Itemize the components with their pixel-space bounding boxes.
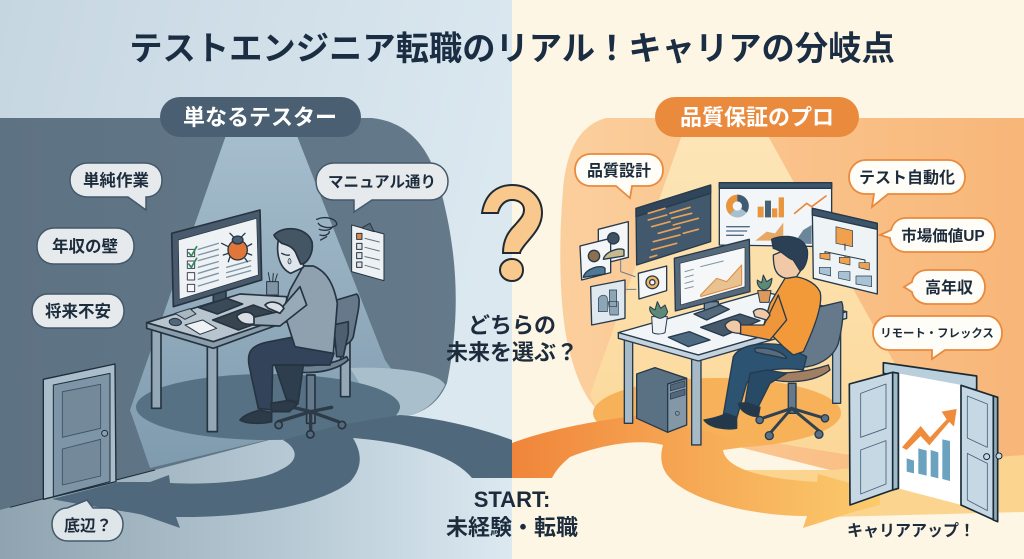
callout: by the manual: マニュアル通り — [328, 173, 436, 191]
callout: high income — [904, 270, 985, 304]
callout: test automation — [849, 160, 965, 207]
center prompt text — [446, 313, 578, 365]
panel: left side background — [0, 0, 512, 559]
start label: 未経験・転職 — [446, 515, 578, 540]
chair — [755, 302, 843, 440]
icon: open door with growth chart — [849, 363, 1002, 522]
callout: market value up — [880, 218, 995, 252]
computer tower — [637, 368, 687, 432]
callout: quality design: 品質設計 — [587, 162, 651, 180]
monitor — [674, 239, 750, 320]
callout: monotonous work: 単純作業 — [83, 171, 150, 190]
floating analytics dashboard — [719, 183, 832, 247]
callout: salary ceiling: 年収の壁 — [52, 236, 118, 256]
callout: market value up: 市場価値UP — [901, 226, 985, 245]
person: smiling QA engineer — [704, 236, 821, 429]
callout: bottom rung — [52, 500, 123, 541]
heading pill: quality assurance pro: 品質保証のプロ — [680, 105, 834, 130]
heading pill: simple tester: 単なるテスター — [183, 105, 337, 130]
callout: career anxiety: 将来不安 — [45, 302, 111, 321]
center prompt text: どちらの — [468, 313, 556, 338]
icon: stress swirl — [317, 218, 337, 240]
icon: clipboard checklist — [352, 223, 384, 281]
icon: question mark — [482, 185, 542, 281]
floating code panel — [636, 185, 711, 265]
callout: high income: 高年収 — [925, 278, 973, 297]
callout: bottom rung: 底辺？ — [64, 517, 112, 535]
start label: START: — [474, 487, 550, 512]
desk items — [169, 273, 280, 334]
desk — [618, 292, 847, 445]
floating folder structure panel — [812, 208, 877, 294]
callout: by the manual — [316, 163, 448, 212]
icon: bug on screen — [222, 233, 252, 262]
center prompt text: 未来を選ぶ？ — [446, 340, 578, 365]
tablet — [668, 332, 710, 347]
potted plants — [650, 275, 772, 334]
label: career up: キャリアアップ！ — [847, 522, 975, 540]
heading pill: quality assurance pro — [655, 97, 859, 137]
team and process icons — [580, 222, 667, 325]
panel: right side background — [512, 0, 1024, 559]
person: worried tester — [237, 229, 337, 423]
callout: test automation: テスト自動化 — [859, 168, 955, 187]
callout: salary ceiling — [37, 228, 134, 264]
title: テストエンジニア転職のリアル！キャリアの分岐点 — [129, 31, 895, 68]
chair — [274, 294, 359, 438]
callout: remote and flex: リモート・フレックス — [880, 327, 994, 340]
monitor — [172, 210, 262, 314]
callout: remote and flex — [873, 316, 1002, 359]
floor path: right orange route to the open door — [512, 378, 880, 528]
start label — [446, 487, 578, 540]
heading pill: simple tester — [160, 97, 361, 137]
callout: quality design — [575, 154, 663, 198]
illustration: tired tester at desk — [147, 210, 384, 438]
illustration: confident QA engineer at desk — [580, 183, 877, 445]
callout: career anxiety — [32, 294, 124, 328]
callout: monotonous work — [70, 163, 162, 210]
desk with legs — [147, 294, 350, 432]
floor path: left grey route to the low door — [52, 374, 512, 528]
icon: closed door — [10, 364, 155, 507]
keyboard — [701, 314, 760, 336]
